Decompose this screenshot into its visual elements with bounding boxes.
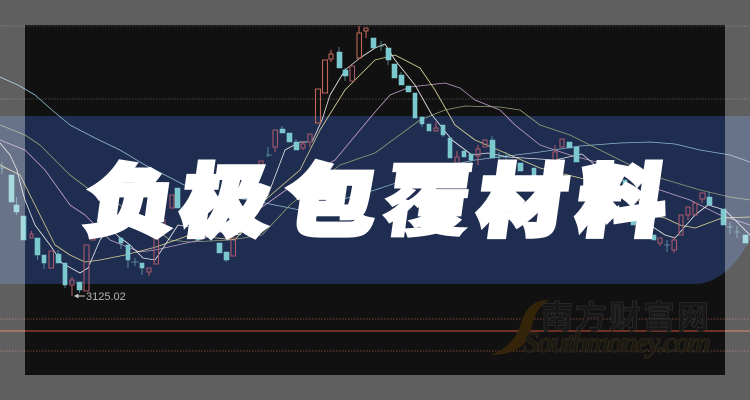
title bbox=[81, 139, 674, 252]
moving average: MA30 green line bbox=[0, 106, 750, 242]
title: 极 bbox=[175, 139, 278, 252]
moving average: MA60 blue line bbox=[0, 77, 750, 210]
watermark: Southmoney logo bbox=[490, 299, 711, 359]
candlestick chart bbox=[0, 26, 750, 296]
candles bbox=[0, 26, 748, 296]
title: 覆 bbox=[377, 139, 480, 252]
moving average: MA5 white line bbox=[0, 44, 750, 273]
title: 料 bbox=[571, 139, 674, 252]
low price label: 3125.02: 3125.02 bbox=[86, 291, 126, 303]
title: 包 bbox=[279, 139, 384, 252]
moving average: MA20 pink line bbox=[0, 83, 750, 252]
title: 负 bbox=[81, 139, 184, 252]
band: translucent navy title strip bbox=[0, 116, 750, 284]
moving average: MA10 yellow line bbox=[0, 55, 750, 262]
watermark: Southmoney logo: Southmoney.com bbox=[523, 326, 711, 359]
watermark: Southmoney logo: 南方财富网 bbox=[541, 299, 709, 335]
title: 材 bbox=[472, 139, 575, 252]
